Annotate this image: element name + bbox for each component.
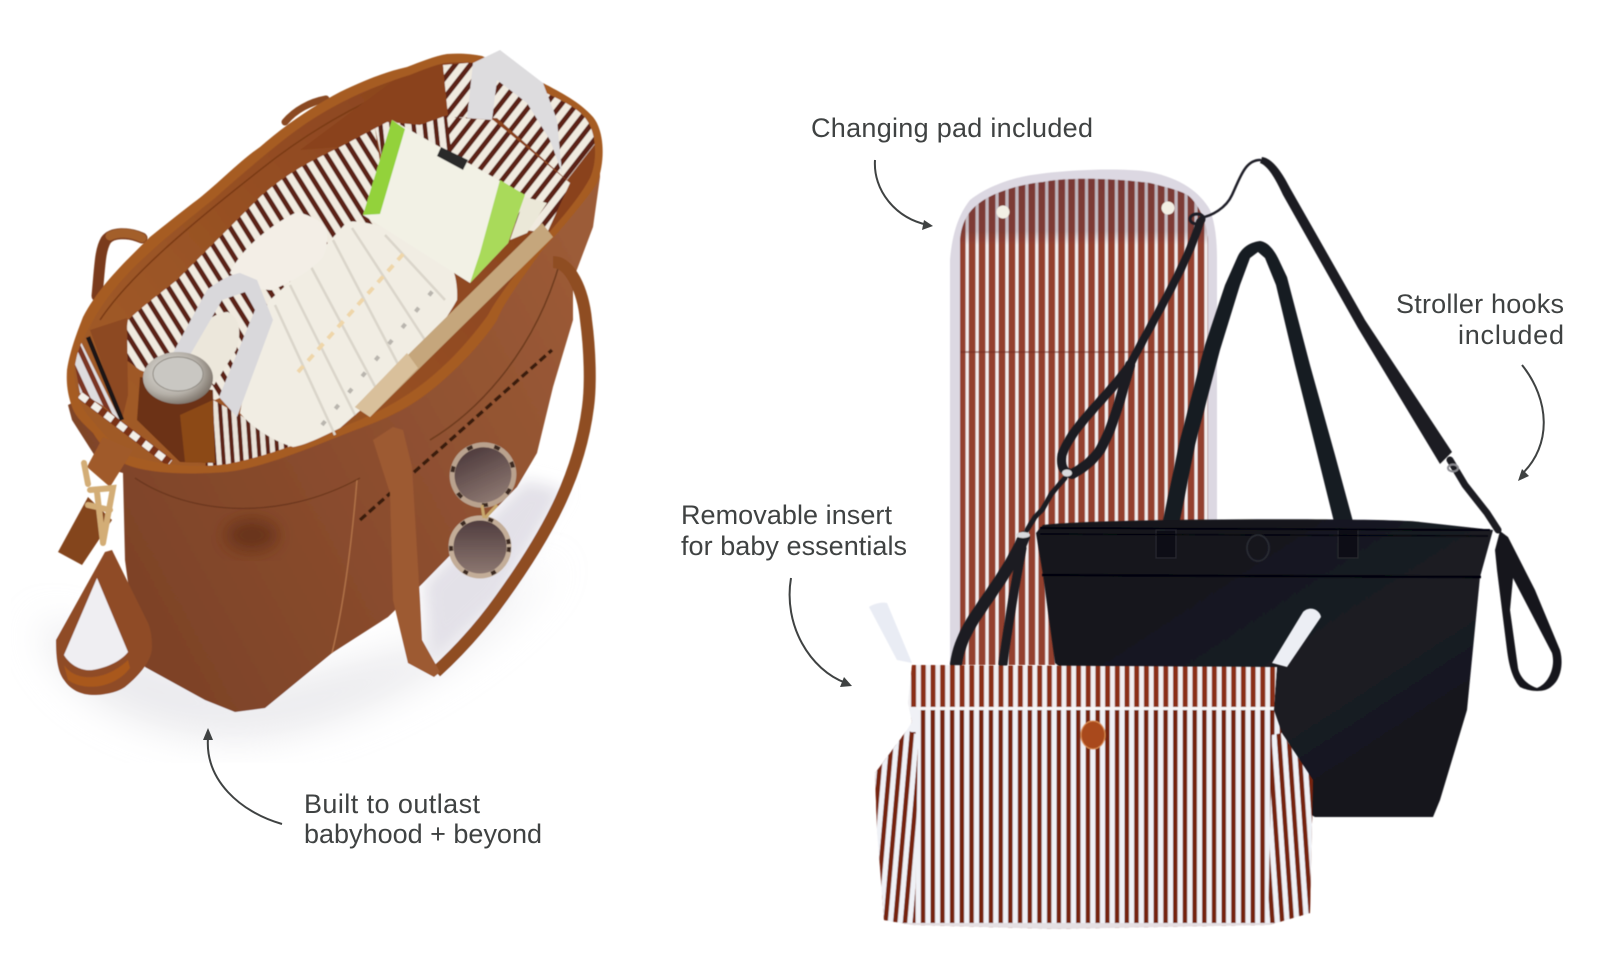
body shading and seams bbox=[135, 262, 560, 653]
back wall end bbox=[300, 66, 448, 150]
handle tabs bbox=[1156, 530, 1358, 558]
pad border bbox=[950, 170, 1217, 665]
snap right bbox=[1162, 202, 1174, 214]
rim bbox=[67, 54, 603, 474]
front corner tab bbox=[87, 437, 133, 487]
long near handle, outer run bbox=[436, 262, 590, 672]
interior wall bbox=[112, 62, 596, 426]
arrow bbox=[875, 160, 933, 230]
arrow bbox=[790, 578, 852, 687]
label: Changing pad included bbox=[811, 113, 1093, 143]
small rolled diaper bbox=[230, 212, 327, 290]
label: Built to outlast bbox=[304, 789, 480, 819]
shadow inside near handle bbox=[423, 480, 565, 665]
callout: stroller hooks bbox=[1396, 289, 1572, 481]
insert logo bbox=[1081, 721, 1105, 749]
label: Stroller hooks bbox=[1396, 289, 1564, 319]
changing pad bbox=[950, 170, 1220, 670]
zip and pocket details bbox=[1040, 528, 1490, 577]
pocket slit bbox=[88, 337, 122, 420]
left strap silver rings bbox=[1016, 470, 1072, 538]
lining: left pocket bbox=[75, 340, 120, 420]
striped insert bbox=[869, 603, 1321, 929]
label: Removable insert bbox=[681, 500, 892, 530]
label: babyhood + beyond bbox=[304, 819, 542, 849]
far side handle bbox=[97, 99, 326, 296]
near handle, front run bbox=[373, 427, 440, 677]
callout: changing pad bbox=[811, 113, 1093, 230]
pad stripes bbox=[960, 178, 1208, 666]
wall highlight line bbox=[100, 104, 361, 320]
right strap hook bbox=[1448, 460, 1498, 530]
wrist loop bbox=[1495, 531, 1562, 691]
lining: right side bbox=[447, 117, 570, 233]
sunglasses bbox=[442, 435, 524, 576]
label: for baby essentials bbox=[681, 531, 907, 561]
callout: removable insert bbox=[681, 500, 907, 687]
arrow bbox=[203, 728, 282, 824]
left wall strip bbox=[90, 318, 128, 420]
diapers stack bbox=[190, 212, 457, 447]
small diaper behind strap bbox=[190, 312, 239, 385]
white pull tab left bbox=[869, 603, 912, 663]
callout: built to outlast bbox=[203, 728, 542, 849]
white pull tab right bbox=[1272, 609, 1321, 667]
lining: top right pocket bbox=[443, 62, 600, 180]
thin strap section and knot bbox=[1190, 160, 1260, 224]
lining: front bbox=[205, 400, 291, 466]
wrist loop bbox=[56, 550, 152, 695]
snap left bbox=[996, 206, 1010, 218]
bag body bbox=[68, 133, 600, 712]
chevron trim bbox=[80, 395, 170, 463]
bottle bbox=[137, 352, 215, 463]
bag body bbox=[1036, 519, 1493, 817]
lining: back band bbox=[122, 128, 400, 400]
tan board lower bbox=[355, 353, 418, 417]
bag ground shadow bbox=[40, 560, 560, 738]
crossbody strap, right run bbox=[1260, 157, 1452, 464]
tassel bbox=[58, 497, 112, 565]
tan board bbox=[355, 223, 553, 417]
bag interior bbox=[74, 62, 596, 466]
top handle bbox=[1157, 241, 1358, 558]
embossed logo bbox=[1247, 535, 1269, 561]
brown tote bag bbox=[40, 50, 620, 738]
gold hardware bbox=[84, 463, 113, 543]
lining: centre band bbox=[374, 115, 468, 156]
arrow bbox=[1518, 365, 1544, 481]
insert body bbox=[875, 665, 1313, 929]
grey insert strap, back bbox=[467, 50, 562, 173]
black bag bbox=[956, 157, 1562, 817]
insert panels bbox=[875, 664, 1315, 929]
wipes pack bbox=[363, 120, 547, 283]
grey insert strap, front bbox=[173, 273, 273, 417]
crossbody strap, left run with loop bbox=[956, 222, 1200, 664]
label: included bbox=[1458, 320, 1564, 350]
